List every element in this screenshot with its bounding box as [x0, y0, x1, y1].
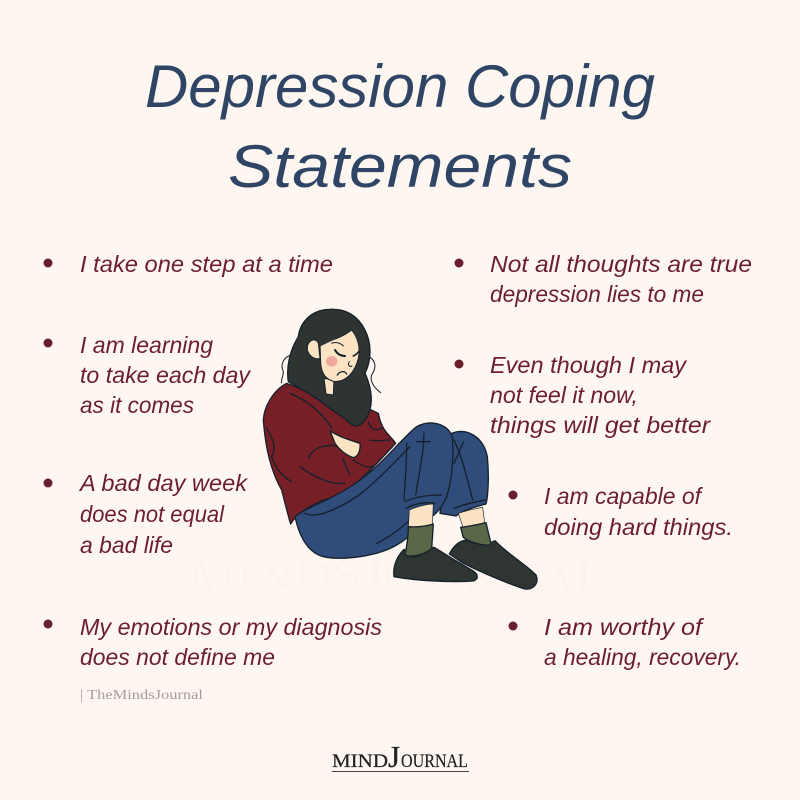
jeans creases — [305, 433, 486, 543]
back hair — [288, 309, 371, 426]
sweater — [263, 383, 396, 524]
statement: one step at a time: I take one step at a time — [80, 251, 333, 277]
statement: a bad day: A bad day week — [78, 470, 249, 496]
statement: learning each day — [44, 332, 251, 418]
statement: things will get better: Even though I may — [490, 352, 688, 378]
logo: Mind Journal: OURNAL — [401, 751, 468, 772]
front leg skin — [408, 504, 433, 528]
title — [145, 53, 655, 200]
stray hair strands — [281, 355, 381, 393]
blush — [326, 356, 337, 367]
logo: Mind Journal — [332, 739, 469, 774]
neck — [324, 378, 334, 395]
hand — [330, 431, 360, 458]
logo: Mind Journal: J — [388, 739, 400, 774]
front shoe — [394, 547, 477, 582]
eyes and mouth — [332, 343, 359, 375]
credit line: | TheMindsJournal — [80, 687, 203, 702]
statement: emotions and diagnosis: does not define me — [80, 644, 275, 670]
statement: things will get better: things will get better — [490, 412, 711, 438]
sweater folds — [267, 393, 390, 484]
statement: things will get better — [454, 352, 711, 438]
back leg jeans — [440, 432, 488, 516]
front hair fringe — [313, 317, 365, 350]
statement: capable: doing hard things. — [544, 514, 733, 540]
statement: thoughts — [454, 251, 752, 307]
statement: thoughts: Not all thoughts are true — [490, 251, 752, 277]
statement: emotions and diagnosis — [44, 614, 382, 670]
face — [320, 330, 359, 382]
back shoe — [449, 540, 537, 589]
faint watermark behind illustration: MINDSJOURNAL — [188, 551, 608, 600]
statement: capable — [508, 483, 733, 540]
statement: thoughts: depression lies to me — [490, 281, 704, 307]
statement: a bad day: a bad life — [80, 532, 173, 558]
statement: a bad day: does not equal — [80, 501, 225, 527]
ear — [307, 340, 320, 359]
statement: worthy — [508, 614, 741, 670]
title: Statements — [228, 133, 572, 200]
statement: learning each day: to take each day — [80, 362, 251, 388]
statement: learning each day: as it comes — [80, 392, 194, 418]
statement: a bad day — [44, 470, 249, 558]
front sock — [405, 524, 433, 556]
statement: emotions and diagnosis: My emotions or my diagnosis — [80, 614, 382, 640]
statement: learning each day: I am learning — [80, 332, 213, 358]
logo: Mind Journal: MIND — [332, 751, 388, 772]
statement: worthy: a healing, recovery. — [544, 644, 741, 670]
front leg jeans — [295, 423, 453, 558]
statement: worthy: I am worthy of — [544, 614, 705, 640]
illustration: sad woman sitting hugging herself — [263, 309, 537, 589]
title: Depression Coping — [145, 53, 655, 120]
back leg skin — [458, 507, 485, 528]
back sock — [461, 523, 491, 545]
statement: things will get better: not feel it now, — [490, 382, 638, 408]
statement: capable: I am capable of — [544, 483, 704, 509]
